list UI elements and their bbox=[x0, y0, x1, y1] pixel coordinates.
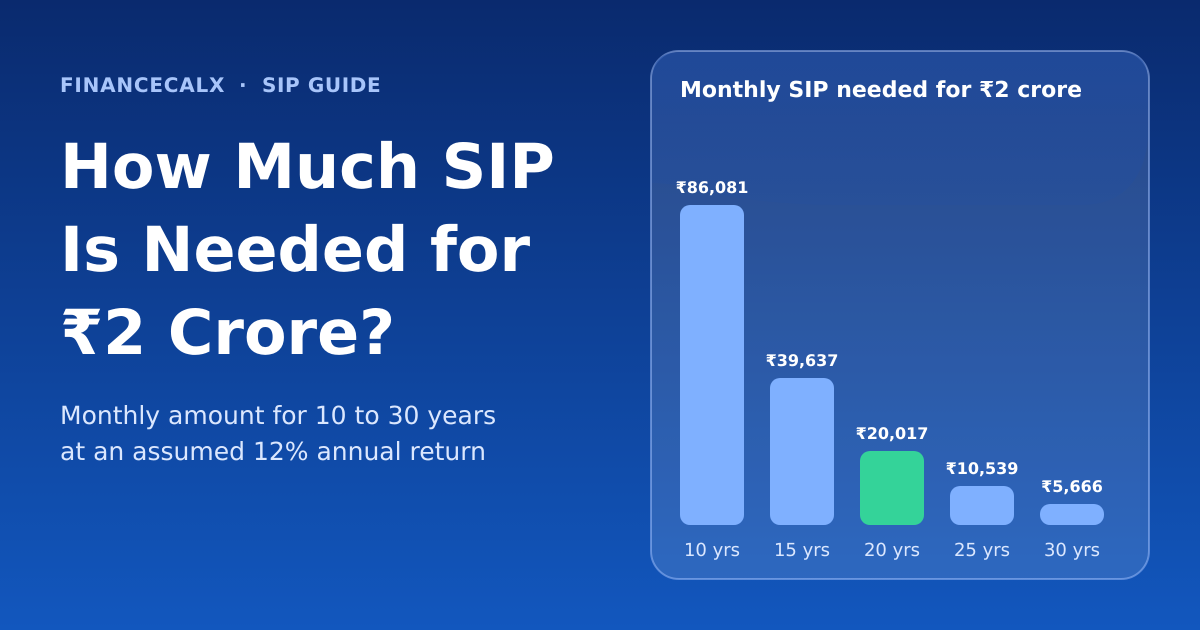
bar: 10 yrs: ₹86,081 bbox=[676, 178, 748, 197]
title: How Much SIP bbox=[60, 130, 555, 203]
panel heading: Monthly SIP needed for ₹2 crore bbox=[680, 78, 1082, 103]
bar: 25 yrs: ₹10,539 bbox=[946, 459, 1018, 478]
bar chart bbox=[676, 178, 1104, 561]
bar: 10 yrs: 10 yrs bbox=[684, 540, 740, 561]
title: ₹2 Crore? bbox=[60, 296, 395, 369]
bar: 15 yrs: ₹39,637 bbox=[766, 351, 838, 370]
bar: 25 yrs: 25 yrs bbox=[954, 540, 1010, 561]
bar: 20 yrs highlighted bbox=[856, 424, 928, 561]
bar: 15 yrs: 15 yrs bbox=[774, 540, 830, 561]
eyebrow: FINANCECALX bbox=[60, 73, 225, 97]
bar: 25 yrs bbox=[946, 459, 1018, 561]
bar: 20 yrs highlighted: 20 yrs bbox=[864, 540, 920, 561]
bar: 20 yrs highlighted: ₹20,017 bbox=[856, 424, 928, 443]
title: Is Needed for bbox=[60, 213, 531, 286]
subtitle: at an assumed 12% annual return bbox=[60, 437, 486, 466]
eyebrow bbox=[60, 73, 381, 97]
bar: 30 yrs bbox=[1040, 477, 1104, 561]
bar: 10 yrs bbox=[676, 178, 748, 561]
eyebrow: · bbox=[239, 73, 247, 97]
title bbox=[60, 130, 555, 369]
panel: monthly SIP chart bbox=[651, 51, 1149, 579]
eyebrow: SIP GUIDE bbox=[262, 73, 381, 97]
subtitle bbox=[60, 401, 496, 466]
panel top sheen bbox=[652, 52, 1148, 205]
panel background bbox=[651, 51, 1149, 579]
subtitle: Monthly amount for 10 to 30 years bbox=[60, 401, 496, 430]
bar: 15 yrs bbox=[766, 351, 838, 561]
bar: 30 yrs: 30 yrs bbox=[1044, 540, 1100, 561]
bar: 30 yrs: ₹5,666 bbox=[1041, 477, 1103, 496]
